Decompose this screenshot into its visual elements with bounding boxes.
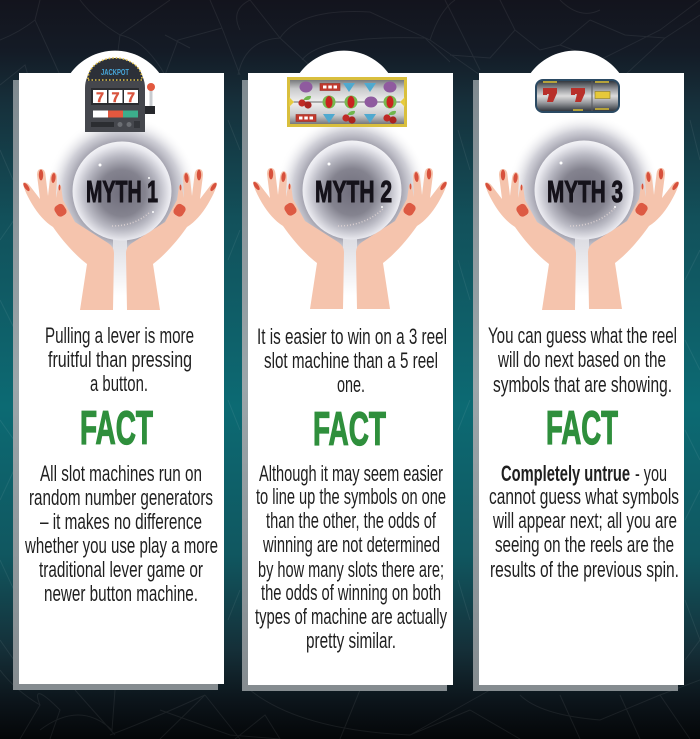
fact text: Although it may seem easier [259,461,443,486]
panel: myth 3 [473,51,684,691]
myth statement: slot machine than a 5 reel [264,348,438,373]
panel top arch [299,51,389,74]
fact text [24,461,218,606]
fact text: than the other, the odds of [266,508,437,533]
fact heading: FACT [546,401,618,454]
icon: lever slot machine: 7 [127,89,135,105]
fact text: pretty similar. [306,628,396,653]
illustration: hands and crystal ball [252,114,448,310]
fact text [255,461,447,653]
fact text: winning are not determined [262,532,440,557]
myth label: MYTH 2 [315,174,392,209]
panel shadow [242,80,447,691]
myth statement [45,323,194,396]
myth statement: a button. [90,371,148,396]
fact text: random number generators [29,485,213,510]
panel card [479,73,684,685]
panel: myth 1 [13,51,224,690]
panel top arch [70,51,160,74]
icon: lever slot machine [85,58,155,132]
panel card [19,73,224,684]
fact text: whether you use play a more [24,533,218,558]
myth statement [257,324,447,397]
fact text: - you [635,461,667,486]
icon: five reel slot [287,77,407,127]
illustration: hands and crystal ball [22,115,218,310]
fact text: Completely untrue [501,461,630,486]
fact text: the odds of winning on both [261,580,441,605]
myth statement [488,323,677,397]
fact text: traditional lever game or [39,557,203,582]
fact text [489,461,679,582]
icon: lever slot machine: JACKPOT [101,68,129,77]
myth statement: It is easier to win on a 3 reel [257,324,447,349]
myth statement: Pulling a lever is more [45,323,194,348]
myth statement: fruitful than pressing [48,347,192,372]
panel shadow [473,80,678,691]
myth label: MYTH 3 [547,174,623,209]
illustration: hands and crystal ball [484,114,680,310]
fact heading: FACT [313,402,386,455]
icon: lever slot machine: 7 [96,89,104,105]
panel top arch [530,51,620,74]
panel: myth 2 [242,51,453,691]
fact text: to line up the symbols on one [256,484,446,509]
fact text: newer button machine. [44,581,198,606]
panel shadow [13,80,218,690]
fact text: All slot machines run on [40,461,202,486]
fact heading: FACT [80,401,153,454]
icon: three reel slot [535,79,620,113]
fact text: – it makes no difference [40,509,202,534]
myth statement: one. [337,372,365,397]
panel card [248,73,453,685]
fact text: types of machine are actually [255,604,447,629]
icon: lever slot machine: 7 [112,89,120,105]
myth label: MYTH 1 [86,174,158,209]
fact text: by how many slots there are; [258,557,444,582]
